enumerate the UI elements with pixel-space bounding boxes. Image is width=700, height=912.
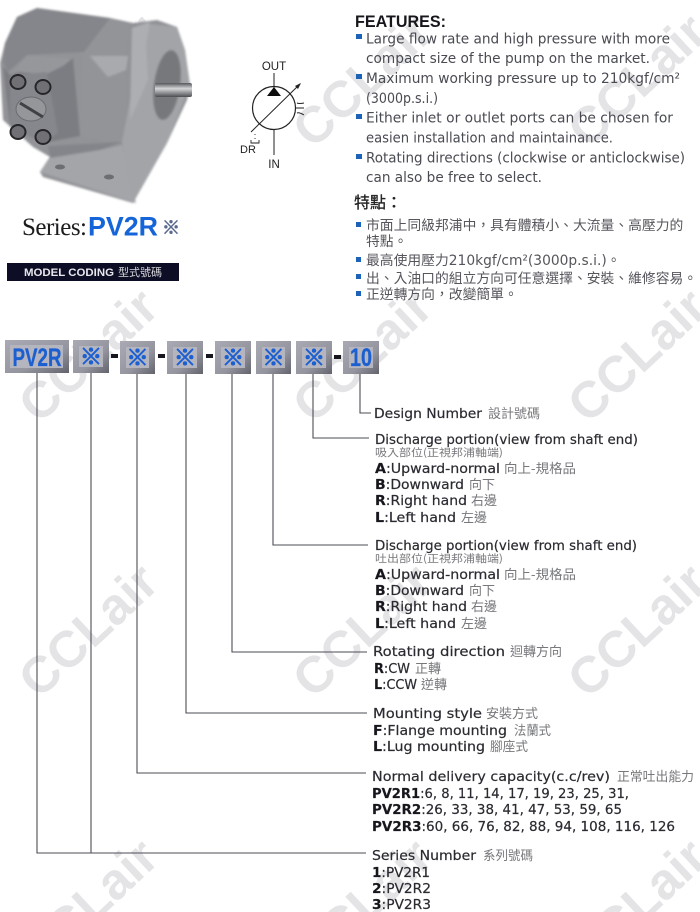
hydraulic symbol: OUT: [262, 61, 286, 73]
box: option 4: [215, 340, 251, 374]
label: rotating direction: R:CW: [374, 662, 410, 677]
label: normal delivery capacity: Normal delivery capacity(c.c/rev): [372, 770, 610, 785]
icon: pump photo: [0, 8, 192, 203]
features list: [356, 32, 685, 186]
label: discharge portion 1: L:Left hand: [375, 511, 456, 526]
watermark: CCLair repeated: CCLair: [281, 2, 443, 158]
chinese features list: 出、入油口的組立方向可任意選擇、安裝、維修容易。: [366, 270, 697, 287]
label: rotating direction: L:CCW: [374, 678, 417, 693]
chinese features list: 最高使用壓力210kgf/cm²(3000p.s.i.)。: [366, 252, 621, 269]
label: discharge portion 1: A:Upward-normal: [375, 462, 500, 477]
label: mounting style: F:Flange mounting: [373, 724, 507, 739]
watermark: CCLair repeated: CCLair: [281, 552, 443, 708]
features list: Either inlet or outlet ports can be chosen for: [366, 110, 673, 126]
label: mounting style: Mounting style: [373, 707, 482, 722]
heading bar: model coding: 型式號碼: [118, 264, 162, 280]
label: series number: 1:PV2R1: [372, 866, 430, 881]
label: rotating direction: 迴轉方向: [510, 641, 562, 660]
label: discharge portion 1: 右邊: [471, 490, 497, 509]
label: discharge portion 1: 向上-規格品: [504, 458, 576, 477]
box: option 5: ※: [262, 340, 285, 372]
box: option 2: [120, 340, 155, 374]
label: discharge portion 2: R:Right hand: [375, 600, 467, 615]
label: series number: 系列號碼: [483, 845, 533, 864]
dashes: [111, 354, 341, 359]
series title: [22, 212, 180, 242]
label: series number: 2:PV2R2: [372, 882, 431, 897]
label: discharge portion 2: 向上-規格品: [504, 564, 576, 583]
label: rotating direction: 正轉: [415, 658, 441, 677]
box: design number 10: [343, 341, 379, 374]
box: option 4: ※: [222, 340, 244, 372]
watermark: CCLair repeated: CCLair: [281, 277, 443, 433]
label: rotating direction: Rotating direction: [373, 645, 505, 660]
box: PV2R: PV2R: [12, 344, 62, 372]
features list: (3000p.s.i.): [366, 91, 438, 107]
label: discharge portion 2: A:Upward-normal: [375, 568, 500, 583]
label: normal delivery capacity: [372, 766, 694, 835]
features heading: FEATURES:: [355, 12, 446, 31]
label: mounting style: 安裝方式: [486, 703, 538, 722]
pump bolts and port: [10, 75, 50, 144]
label: discharge portion 1: R:Right hand: [375, 494, 467, 509]
box: option 1: [73, 340, 109, 373]
series title: ※: [162, 214, 180, 240]
chinese features heading: 特點：: [354, 189, 402, 213]
label: rotating direction: 逆轉: [421, 674, 447, 693]
label: mounting style: 腳座式: [490, 736, 528, 755]
label: discharge portion 1: B:Downward: [375, 478, 464, 493]
box: design number 10: 10: [350, 344, 372, 372]
box: PV2R: [5, 340, 69, 373]
label: normal delivery capacity: PV2R1:6, 8, 11, 14, 17, 19, 23, 25, 31,: [372, 787, 629, 802]
watermark: CCLair repeated: CCLair: [7, 552, 169, 708]
label: discharge portion 2: 向下: [469, 580, 495, 599]
series title: PV2R: [88, 212, 158, 242]
pump bore and shaft: [149, 49, 185, 121]
label: mounting style: [373, 703, 551, 755]
heading bar: model coding: MODEL CODING: [24, 267, 114, 279]
label: discharge portion 1: 吸入部位(正視邦浦軸端): [375, 445, 503, 460]
box: option 3: ※: [174, 340, 196, 372]
box: option 1: ※: [80, 340, 102, 372]
chinese features list: [356, 217, 697, 303]
features list: Large flow rate and high pressure with more: [366, 32, 670, 48]
chinese features list: 正逆轉方向，改變簡單。: [366, 287, 518, 303]
label: design number: [374, 403, 540, 422]
label: series number: [372, 845, 533, 912]
label: design number: Design Number: [374, 407, 483, 422]
label: mounting style: 法蘭式: [514, 720, 551, 739]
label: discharge portion 1: Discharge portion(view from shaft end): [375, 433, 638, 448]
hydraulic symbol: IN: [268, 159, 280, 171]
label: discharge portion 1: 向下: [469, 474, 495, 493]
label: design number: 設計號碼: [488, 403, 540, 422]
box: option 6: ※: [303, 340, 325, 372]
label: discharge portion 2: B:Downward: [375, 584, 464, 599]
box: option 5: [256, 340, 291, 374]
features list: Rotating directions (clockwise or anticlockwise): [366, 150, 685, 166]
label: normal delivery capacity: 正常吐出能力: [617, 766, 694, 785]
features list: easien installation and maintainance.: [366, 130, 613, 146]
model code boxes: [5, 340, 379, 374]
box: option 2: ※: [126, 340, 149, 372]
label: discharge portion 2: 右邊: [471, 596, 497, 615]
hydraulic symbol: DR: [240, 144, 256, 156]
features list: Maximum working pressure up to 210kgf/cm²: [366, 71, 680, 87]
hydraulic symbol: [240, 61, 304, 171]
label: discharge portion 1: 左邊: [461, 507, 487, 526]
series title: Series:: [22, 214, 87, 241]
box: option 6: [296, 340, 332, 374]
label: normal delivery capacity: PV2R2:26, 33, 38, 41, 47, 53, 59, 65: [372, 803, 622, 818]
features list: compact size of the pump on the market.: [366, 51, 650, 67]
watermark: CCLair repeated: CCLair: [7, 2, 169, 158]
label: mounting style: L:Lug mounting: [373, 740, 485, 755]
chinese features list: 特點。: [366, 234, 407, 250]
watermark: CCLair repeated: CCLair: [7, 277, 169, 433]
connector lines: [37, 373, 371, 853]
heading bar: model coding: [7, 263, 179, 281]
label: discharge portion 2: 吐出部位(正視邦浦軸端): [375, 551, 503, 566]
label: discharge portion 2: 左邊: [461, 613, 487, 632]
label: rotating direction: [373, 641, 562, 693]
label: discharge portion 2: Discharge portion(view from shaft end): [375, 539, 637, 554]
features list: can also be free to select.: [366, 170, 542, 186]
label: normal delivery capacity: PV2R3:60, 66, 76, 82, 88, 94, 108, 116, 126: [372, 820, 675, 835]
label: discharge portion 2: L:Left hand: [375, 617, 456, 632]
box: option 3: [167, 340, 203, 374]
label: series number: Series Number: [372, 849, 477, 864]
label: discharge portion 1: [375, 433, 638, 526]
chinese features list: 市面上同級邦浦中，具有體積小、大流量、高壓力的: [366, 217, 683, 234]
label: discharge portion 2: [375, 539, 637, 632]
